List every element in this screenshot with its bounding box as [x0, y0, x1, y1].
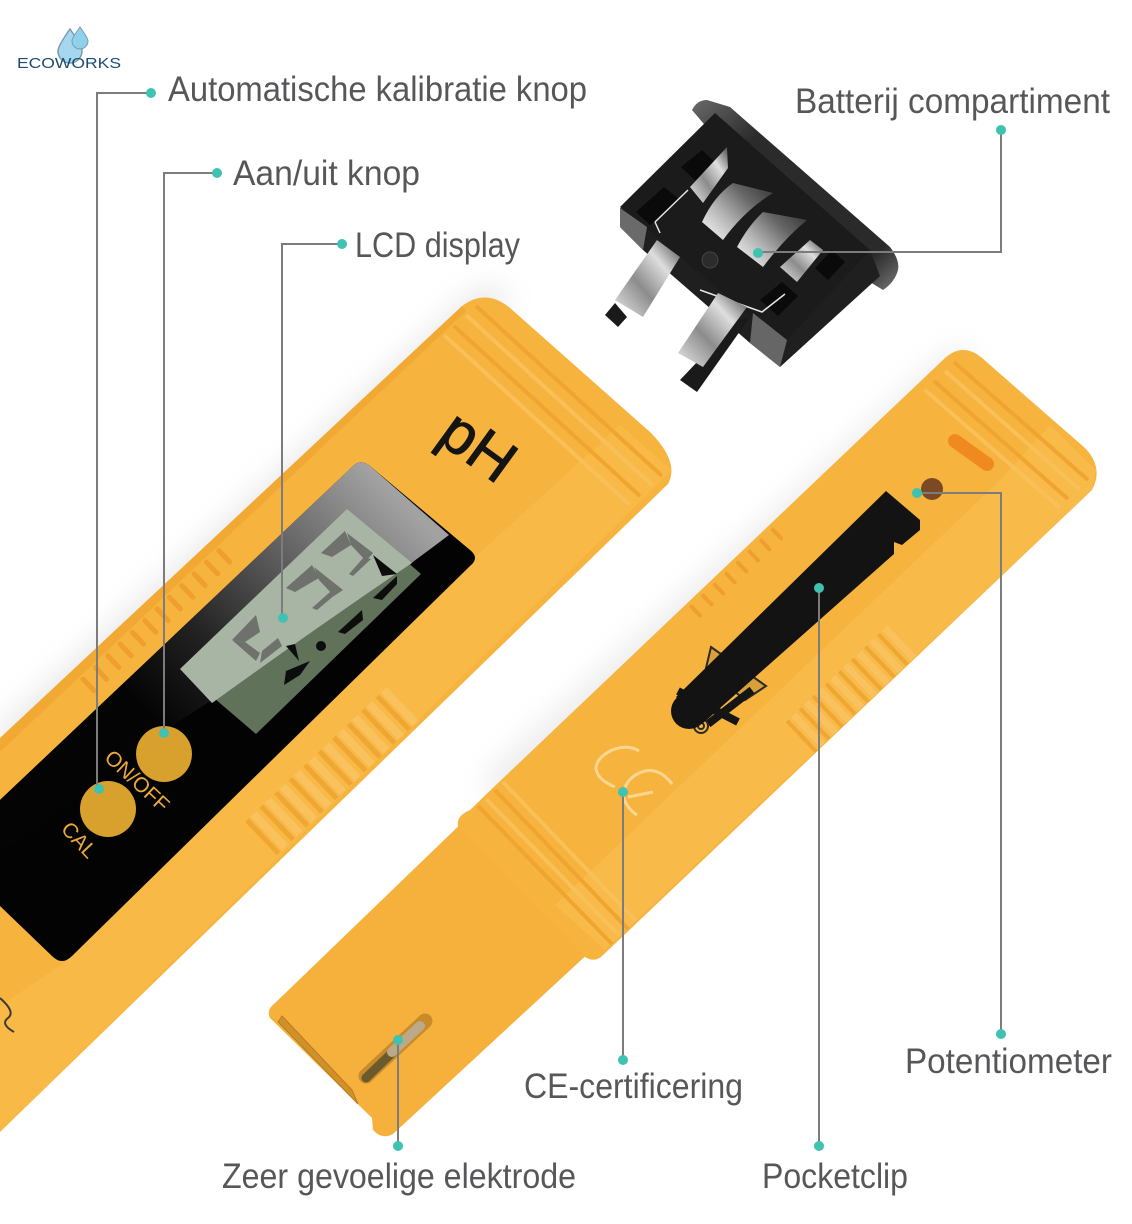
LCD screen: [180, 509, 421, 734]
button: CAL: [80, 781, 136, 837]
inner recess outline: [655, 190, 785, 312]
recess patches: [636, 150, 845, 316]
potentiometer hole: [921, 478, 943, 500]
callout: Potentiometer: Potentiometer: [905, 1042, 1112, 1081]
printed fragment: [0, 998, 14, 1032]
callout: LCD display: [278, 226, 520, 623]
bottom grip ribs: [787, 628, 914, 751]
pen body: [0, 297, 671, 1132]
callout: Zeer gevoelige elektrode: [222, 1035, 576, 1196]
callout: Pocketclip: [762, 583, 908, 1196]
LCD digits: [232, 531, 373, 663]
callout: Batterij compartiment: [753, 82, 1110, 258]
callout: Potentiometer: [905, 488, 1112, 1081]
button: ON/OFF: [136, 726, 192, 782]
right clip tip: [680, 317, 750, 392]
flange: [692, 100, 898, 290]
light facet: [555, 425, 1096, 950]
callout: Automatische kalibratie knop: [94, 70, 587, 794]
pocket clip: [671, 491, 920, 729]
collar ribs: [478, 782, 636, 944]
left clip tip: [605, 303, 627, 327]
upper contact: [690, 147, 728, 203]
right spring clip: [678, 293, 747, 367]
bottom grip ribs: [247, 690, 416, 853]
wordmark: ECOWORKS: [17, 55, 121, 72]
callout: Batterij compartiment: Batterij compartiment: [795, 82, 1110, 121]
callout: Zeer gevoelige elektrode: Zeer gevoelige elektrode: [222, 1157, 576, 1196]
end ribs: [925, 362, 1088, 508]
housing grey side left: [620, 208, 647, 250]
upper dark edge: [0, 306, 466, 752]
pH mark: pH: [428, 396, 529, 496]
display glare: [0, 462, 449, 850]
small drop: [72, 27, 88, 49]
callout: Aan/uit knop: Aan/uit knop: [233, 154, 420, 193]
pen body: [458, 350, 1097, 960]
probe end opening: [278, 1016, 358, 1104]
warning icon: [678, 647, 766, 733]
housing top: [620, 113, 870, 340]
black display panel: [0, 462, 475, 961]
battery vent slot: [955, 441, 987, 464]
CE mark: [596, 747, 672, 815]
end ribs: [444, 306, 662, 505]
battery compartment: [605, 100, 898, 392]
callout: CE-certificering: CE-certificering: [524, 1067, 743, 1106]
left spring clip: [615, 240, 680, 317]
callout: CE-certificering: [524, 787, 743, 1106]
logo: Ecoworks: [17, 27, 121, 72]
housing grey side front: [750, 313, 787, 367]
callout: Pocketclip: Pocketclip: [762, 1157, 908, 1196]
top cell: [702, 183, 773, 240]
top grip ribs: [692, 530, 781, 615]
label ON/OFF: ON/OFF: [100, 746, 174, 817]
electrode slot: [366, 1021, 425, 1076]
lower light facet: [0, 425, 672, 1132]
label CAL: CAL: [56, 818, 101, 863]
bottom cell: [737, 212, 807, 267]
top grip ribs: [83, 550, 230, 691]
pen: back view with clip: [269, 350, 1097, 1136]
housing lower shell: [620, 208, 880, 367]
pen: front view with display: [0, 297, 672, 1132]
pen probe: [269, 815, 592, 1136]
callout: Aan/uit knop: [159, 154, 420, 738]
screw: [702, 252, 718, 268]
right contact: [780, 240, 823, 282]
callout: LCD display: LCD display: [355, 226, 520, 265]
callout: Automatische kalibratie knop: Automatische kalibratie knop: [168, 70, 587, 109]
soft shadows: [0, 286, 975, 810]
large drop: [58, 29, 82, 63]
